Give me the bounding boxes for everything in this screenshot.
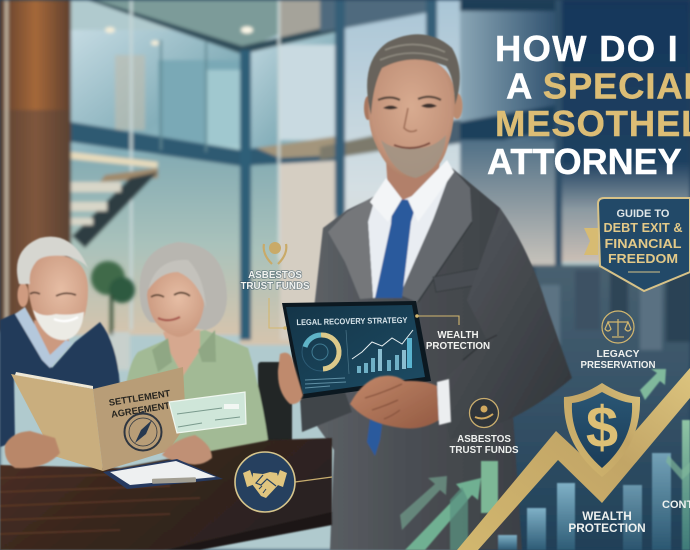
cheque bbox=[169, 392, 246, 433]
callout: legacy preservation: LEGACY bbox=[597, 349, 640, 360]
ribbon bbox=[584, 228, 598, 255]
man's collar bbox=[15, 307, 72, 368]
clipboard bbox=[103, 459, 223, 489]
man's face bbox=[28, 254, 88, 339]
chair bbox=[258, 362, 292, 444]
callout: asbestos trust funds upper: TRUST FUNDS bbox=[240, 281, 310, 292]
growth chart: bars, arrows and shield bbox=[400, 368, 690, 550]
callout: asbestos trust funds lower: TRUST FUNDS bbox=[449, 445, 519, 456]
chest pocket bbox=[433, 268, 484, 292]
man's sweater bbox=[0, 312, 120, 447]
right page bbox=[93, 367, 186, 471]
woman's hair back bbox=[140, 242, 227, 330]
donut chart bbox=[302, 333, 340, 371]
icon: scales of justice bbox=[602, 311, 634, 343]
eyes bbox=[383, 104, 437, 110]
left sleeve bbox=[300, 392, 352, 432]
callout: asbestos trust funds lower: ASBESTOS bbox=[457, 434, 511, 445]
man's hair bbox=[17, 237, 88, 284]
head bbox=[368, 56, 454, 178]
man's beard bbox=[33, 310, 84, 340]
man's neck bbox=[34, 320, 70, 362]
beard bbox=[381, 135, 446, 178]
suit jacket body bbox=[300, 168, 522, 550]
plant bbox=[91, 261, 135, 370]
tablet title: LEGAL RECOVERY STRATEGY bbox=[296, 315, 408, 327]
hair bbox=[367, 34, 460, 115]
callout: legacy preservation bbox=[580, 311, 656, 371]
collar bbox=[370, 178, 402, 222]
tablet line and bar chart bbox=[305, 330, 413, 388]
woman's blouse bbox=[122, 330, 268, 462]
wealth protection label: WEALTH bbox=[582, 509, 632, 523]
icon: compass bbox=[124, 411, 162, 450]
blouse collar bbox=[152, 338, 172, 372]
icon: hands and heart bbox=[264, 242, 286, 264]
settlement agreement folder: AGREEMENT bbox=[110, 400, 171, 420]
title bbox=[487, 28, 690, 182]
settlement agreement folder bbox=[11, 367, 186, 471]
left lapel bbox=[328, 195, 376, 299]
neck bbox=[386, 160, 440, 200]
woman's neck bbox=[163, 330, 200, 376]
attorney: suit and portrait bbox=[300, 34, 572, 550]
elderly couple bbox=[0, 237, 292, 462]
table bbox=[0, 438, 332, 550]
woman's face bbox=[147, 270, 204, 337]
tie bbox=[375, 199, 417, 298]
ears bbox=[452, 93, 462, 119]
callout: asbestos trust funds upper bbox=[240, 242, 310, 330]
growth chart: bars, arrows and shield: PROTECTION bbox=[568, 521, 646, 535]
shield bbox=[564, 383, 640, 477]
callout: legacy preservation: PRESERVATION bbox=[580, 360, 656, 371]
callout: wealth protection on suit: WEALTH bbox=[437, 330, 479, 341]
folder title: SETTLEMENT bbox=[108, 388, 171, 408]
shirt bbox=[368, 170, 452, 298]
shield: $ bbox=[586, 395, 618, 460]
badge: guide to debt exit and financial freedom: DEBT EXIT & bbox=[604, 221, 682, 235]
hands on folder bbox=[5, 431, 212, 468]
bars bbox=[498, 420, 690, 550]
icon: circled hand bbox=[470, 398, 498, 428]
tablet: legal recovery strategy bbox=[282, 301, 431, 399]
title: ATTORNEY bbox=[487, 141, 682, 182]
jacket sleeve bbox=[438, 208, 572, 440]
big gold arrow bbox=[457, 368, 690, 550]
badge: guide to debt exit and financial freedom: GUIDE TO bbox=[617, 208, 670, 220]
icon: handshake badge bbox=[235, 452, 332, 512]
nose bbox=[404, 108, 417, 132]
green arrows bbox=[400, 369, 690, 550]
left page bbox=[11, 374, 103, 471]
badge: guide to debt exit and financial freedom: FINANCIAL bbox=[604, 236, 682, 251]
mouth bbox=[394, 143, 430, 148]
callout: asbestos trust funds lower bbox=[449, 398, 519, 456]
callout: wealth protection on suit bbox=[415, 314, 490, 352]
right lapel bbox=[400, 168, 472, 302]
callout: asbestos trust funds upper: ASBESTOS bbox=[248, 270, 302, 281]
callout: wealth protection on suit: PROTECTION bbox=[426, 341, 490, 352]
hands holding tablet bbox=[278, 353, 451, 428]
badge: guide to debt exit and financial freedom bbox=[584, 198, 690, 291]
badge: guide to debt exit and financial freedom: FREEDOM bbox=[608, 251, 678, 266]
